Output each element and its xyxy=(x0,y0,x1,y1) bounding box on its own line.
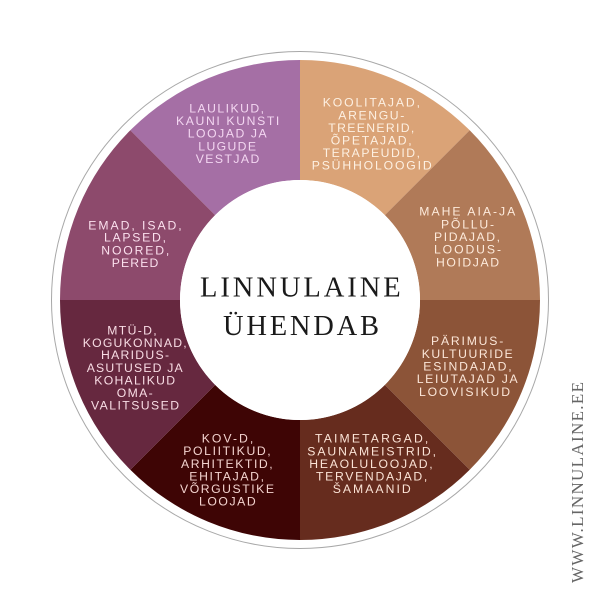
segment: local government and builders: LOOJAD xyxy=(199,494,256,508)
outer ring xyxy=(52,52,548,548)
segment: singers and artists: LOOJAD JA xyxy=(188,127,268,141)
segment: singers and artists: KAUNI KUNSTI xyxy=(176,114,279,128)
segment: NGOs and communities: ASUTUSED JA xyxy=(87,361,184,375)
segment: local government and builders: POLIITIKUD, xyxy=(183,444,271,458)
segment: herbalists and healers: TERVENDAJAD, xyxy=(316,470,427,484)
segment: herbalists and healers: TAIMETARGAD, xyxy=(315,432,428,446)
segment: herbalists and healers: SAUNAMEISTRID, xyxy=(307,444,436,458)
central title: LINNULAINE xyxy=(200,273,401,304)
segment: heritage culture xyxy=(385,300,540,470)
segment: NGOs and communities: VALITSUSED xyxy=(91,399,179,413)
segment: teachers and therapists xyxy=(300,60,470,215)
segment: herbalists and healers xyxy=(300,385,470,540)
segment: local government and builders xyxy=(130,385,300,540)
segment: NGOs and communities: HARIDUS- xyxy=(101,348,169,362)
segment: organic farmers: HOIDJAD xyxy=(436,255,499,269)
segment: heritage culture: ESINDAJAD, xyxy=(423,359,512,373)
segment: families: LAPSED, xyxy=(104,231,166,245)
segment: families: EMAD, ISAD, xyxy=(88,218,182,232)
segment: teachers and therapists: PSÜHHOLOOGID xyxy=(312,159,432,173)
segment: organic farmers xyxy=(385,130,540,300)
segment: heritage culture: KULTUURIDE xyxy=(422,347,513,361)
segment: singers and artists: VESTJAD xyxy=(196,152,259,166)
segment: teachers and therapists: TREENERID, xyxy=(328,121,414,135)
segment: organic farmers: PIDAJAD, xyxy=(434,230,500,244)
segment: heritage culture: LOOVISIKUD xyxy=(419,385,510,399)
segment: NGOs and communities: MTÜ-D, xyxy=(107,323,157,337)
segment: teachers and therapists: KOOLITAJAD, xyxy=(323,96,420,110)
segment: NGOs and communities: KOHALIKUD xyxy=(94,373,175,387)
segment: teachers and therapists: ARENGU- xyxy=(338,108,404,122)
segment: families: NOORED, xyxy=(101,244,169,258)
segment: singers and artists: LAULIKUD, xyxy=(189,101,264,115)
segment: organic farmers: LOODUS- xyxy=(434,243,501,257)
segment: NGOs and communities: OMA- xyxy=(117,386,153,400)
central title xyxy=(180,180,420,420)
segment: local government and builders: EHITAJAD, xyxy=(189,470,264,484)
segment: herbalists and healers: HEAOLULOOJAD, xyxy=(309,457,433,471)
segment: heritage culture: LEIUTAJAD JA xyxy=(417,372,519,386)
website url: WWW.LINNULAINE.EE xyxy=(568,382,587,583)
segment: singers and artists: LUGUDE xyxy=(198,139,256,153)
segment: local government and builders: VÕRGUSTIKE xyxy=(180,481,274,496)
segment: heritage culture: PÄRIMUS- xyxy=(431,334,503,348)
segment: local government and builders: ARHITEKTID, xyxy=(181,457,273,471)
segment: NGOs and communities: KOGUKONNAD, xyxy=(83,336,187,350)
segment: organic farmers: MAHE AIA-JA xyxy=(419,205,516,219)
segment: teachers and therapists: ÕPETAJAD, xyxy=(331,133,412,148)
segment: herbalists and healers: ŠAMAANID xyxy=(333,481,411,496)
segment: singers and artists xyxy=(130,60,300,215)
segment: local government and builders: KOV-D, xyxy=(202,432,253,446)
segment: teachers and therapists: TERAPEUDID, xyxy=(323,146,420,160)
central title: ÜHENDAB xyxy=(223,311,379,342)
segment: organic farmers: PÕLLU- xyxy=(441,216,494,231)
segment: families xyxy=(60,130,215,300)
segment: NGOs and communities xyxy=(60,300,215,470)
segment: families: PERED xyxy=(112,256,158,270)
